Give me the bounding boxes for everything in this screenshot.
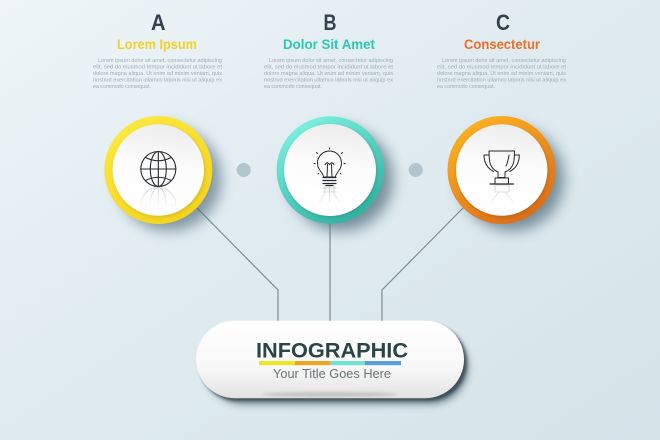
paragraph B: nostrud exercitation ullamco laboris nisi ut aliquip ex [264,78,393,84]
subtitle: Your Title Goes Here [273,366,391,381]
icon: trophy [484,151,519,184]
paragraph B [264,58,394,90]
letter C: C [496,10,510,35]
paragraph C: ea commodo consequat. [437,84,495,90]
paragraph C: nostrud exercitation ullamco laboris nisi ut aliquip ex [437,78,566,84]
paragraph A: nostrud exercitation ullamco laboris nisi ut aliquip ex [93,78,222,84]
paragraph C: Lorem ipsum dolor sit amet, consectetur adipiscing [442,58,566,64]
title: Consectetur: Consectetur [464,36,541,52]
paragraph A: ea commodo consequat. [93,84,151,90]
letter A: A [151,10,166,35]
paragraph B: elit, sed do eiusmod tempor incididunt ut labore et [264,64,394,70]
title pill [196,321,468,404]
paragraph B: dolore magna aliqua. Ut enim ad minim veniam, quis [264,71,393,77]
letter B: B [324,10,336,35]
paragraph A: Lorem ipsum dolor sit amet, consectetur adipiscing [98,58,222,64]
pill lower shading [262,392,398,397]
icon: light bulb [314,148,345,186]
colour bar [259,361,401,365]
dot between A and B [237,163,251,177]
circle C with trophy icon [448,116,564,231]
paragraph A [93,58,223,90]
title: Lorem Ipsum: Lorem Ipsum [117,36,197,52]
paragraph A: elit, sed do eiusmod tempor incididunt ut labore et [93,64,223,70]
paragraph B: Lorem ipsum dolor sit amet, consectetur adipiscing [269,58,393,64]
heading: INFOGRAPHIC: INFOGRAPHIC [256,340,408,362]
paragraph A: dolore magna aliqua. Ut enim ad minim veniam, quis [93,71,222,77]
paragraph C [437,58,567,90]
circle A with globe icon [104,116,221,231]
icon: trophy reflection [491,185,513,202]
section B heading and text [264,10,394,90]
dot between B and C [409,163,423,177]
section C heading and text [437,10,567,90]
connector lines [195,206,465,321]
paragraph C: dolore magna aliqua. Ut enim ad minim veniam, quis [437,71,566,77]
section A heading and text [93,10,223,90]
circle B with light bulb icon [277,116,393,231]
icon: bulb reflection [319,186,340,202]
icon: globe [141,152,176,186]
paragraph B: ea commodo consequat. [264,84,322,90]
icon: globe reflection [140,187,176,204]
paragraph C: elit, sed do eiusmod tempor incididunt ut labore et [437,64,567,70]
title: Dolor Sit Amet: Dolor Sit Amet [283,36,375,52]
